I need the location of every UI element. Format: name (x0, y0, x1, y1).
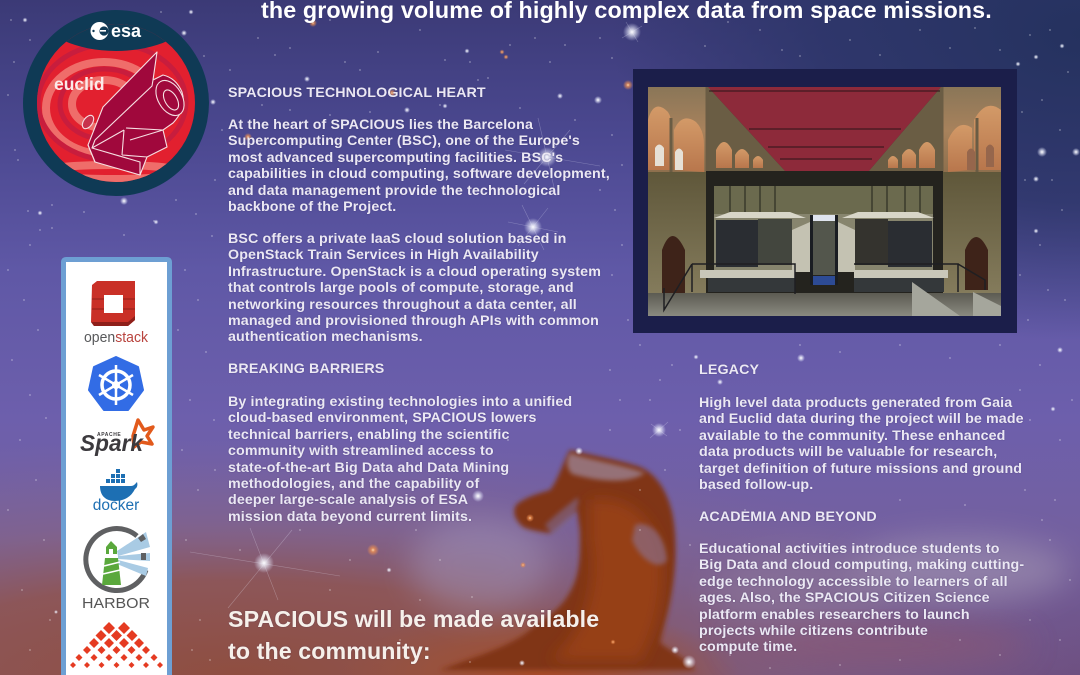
text block: barriers body: community with streamlined access to (228, 443, 494, 459)
text block: legacy body: target definition of future missions and ground (699, 461, 1022, 477)
text block: academia body: compute time. (699, 639, 797, 655)
text block: academia body: platform enables researchers to launch (699, 607, 970, 623)
icon: harbor (82, 529, 150, 612)
icon: harbor: HARBOR (82, 596, 150, 612)
text block: barriers body: By integrating existing technologies into a unified (228, 394, 572, 410)
telescope icon (80, 52, 190, 175)
text block: academia body: ages. Also, the SPACIOUS Citizen Science (699, 590, 990, 606)
navy cap over the red disc (66, 24, 166, 51)
text block: barriers body: mission data beyond current limits. (228, 509, 472, 525)
text block: legacy body: and Euclid data during the project will be made (699, 411, 1024, 427)
text block: barriers body (228, 394, 572, 525)
text block: legacy body: data products will be valuable for research, (699, 444, 997, 460)
railings and floor (648, 293, 1001, 316)
icon: kubernetes (89, 357, 143, 410)
text block: legacy body: available to the community. These enhanced (699, 428, 1005, 444)
text block: barriers body: state-of-the-art Big Data ahd Data Mining (228, 460, 509, 476)
text block: heart body paragraph 1: and data management provide the technological (228, 183, 560, 199)
icon: apache spark (80, 420, 153, 456)
photograph: supercomputer in chapel (633, 69, 1017, 333)
text block: legacy body: based follow-up. (699, 477, 813, 493)
panel: technology logos (64, 260, 170, 675)
text block: barriers body: methodologies, and the capability of (228, 476, 479, 492)
callout: availability statement: SPACIOUS will be made available (228, 606, 599, 632)
text block: spacious technological heart: SPACIOUS TECHNOLOGICAL HEART (228, 85, 486, 101)
text block: heart body paragraph 1: Supercomputing Center (BSC), one of the Europe's (228, 133, 580, 149)
text block: heart body paragraph 1 (228, 117, 610, 215)
esa logo (90, 21, 142, 41)
text block: heart body paragraph 1: At the heart of SPACIOUS lies the Barcelona (228, 117, 533, 133)
callout: availability statement (228, 606, 599, 664)
icon: docker (93, 469, 139, 514)
text block: heart body paragraph 2: BSC offers a private IaaS cloud solution based in (228, 231, 566, 247)
text block: heart body paragraph 2: authentication mechanisms. (228, 329, 423, 345)
text block: academia body (699, 541, 1024, 655)
machine room enclosure (706, 171, 943, 295)
text block: academia body: edge technology accessible to learners of all (699, 574, 1008, 590)
text block: heart body paragraph 2: Infrastructure. OpenStack is a cloud operating system (228, 264, 601, 280)
text block: heart body paragraph 1: backbone of the Project. (228, 199, 396, 215)
text block: breaking barriers: BREAKING BARRIERS (228, 361, 384, 377)
text block: legacy body: High level data products generated from Gaia (699, 395, 1012, 411)
text block: barriers body: deeper large-scale analysis of ESA (228, 492, 468, 508)
text block: academia body: Educational activities introduce students to (699, 541, 1000, 557)
server racks (716, 220, 758, 267)
text block: heart body paragraph 2 (228, 231, 601, 345)
text block: academia body: projects while citizens contribute (699, 623, 928, 639)
red ceiling (708, 87, 941, 172)
euclid mission badge (23, 0, 209, 196)
text block: heart body paragraph 2: that controls large pools of compute, storage, and (228, 280, 574, 296)
icon: openstack (84, 281, 148, 346)
lower walls (648, 172, 706, 293)
text block: legacy body (699, 395, 1024, 493)
horsehead nebula (440, 450, 695, 670)
icon: openstack: openstack (84, 329, 148, 346)
text block: barriers body: technical barriers, enabling the scientific (228, 427, 510, 443)
text block: heart body paragraph 2: managed and provisioned through APIs with common (228, 313, 599, 329)
icon: apache spark: APACHE (97, 432, 121, 438)
text block: barriers body: cloud-based environment, SPACIOUS lowers (228, 410, 537, 426)
wordmark: euclid: euclid (54, 74, 105, 94)
esa logo: esa (111, 21, 142, 41)
text block: heart body paragraph 2: OpenStack Train Services in High Availability (228, 247, 539, 263)
upper walls with arches (648, 87, 710, 175)
icon: docker: docker (93, 497, 139, 514)
callout: availability statement: to the community: (228, 638, 431, 664)
text block: legacy: LEGACY (699, 362, 759, 378)
spiral swirl pattern (42, 62, 182, 179)
text block: heart body paragraph 1: capabilities in cloud computing, software development, (228, 166, 610, 182)
text block: heart body paragraph 2: networking resources throughout a data center, all (228, 297, 577, 313)
large stars (254, 23, 1080, 669)
text block: heart body paragraph 1: most advanced supercomputing facilities. BSC's (228, 150, 563, 166)
text block: academia body: Big Data and cloud computing, making cutting- (699, 557, 1024, 573)
text block: academia and beyond: ACADEMIA AND BEYOND (699, 509, 877, 525)
icon: red diamond logo (70, 622, 163, 668)
icon: apache spark: Spark (80, 430, 144, 456)
